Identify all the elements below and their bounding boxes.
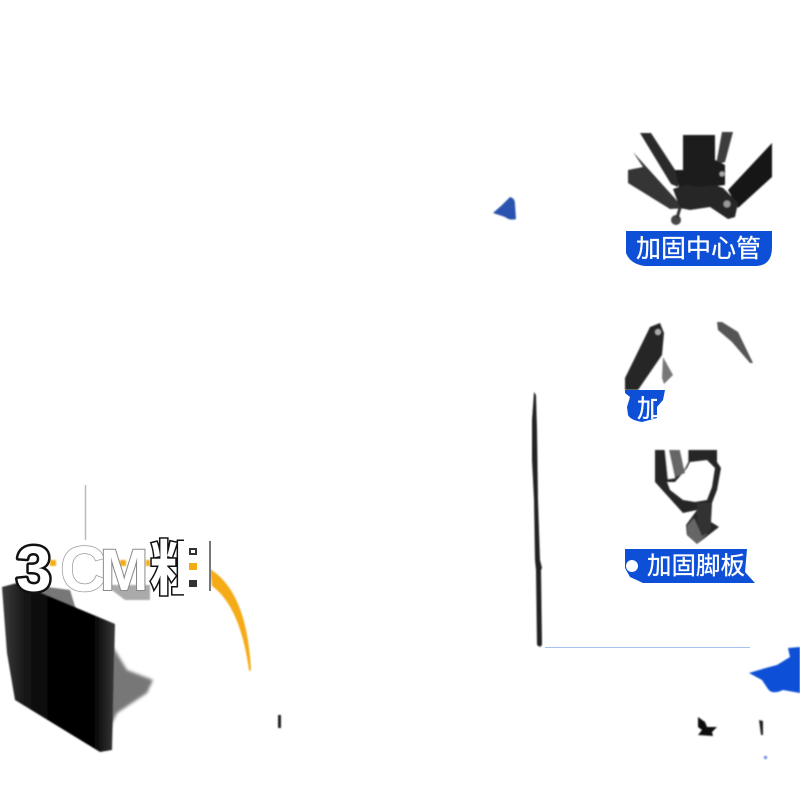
thin blue rule: [545, 646, 750, 648]
headline: 3CM粗: 粗: [149, 536, 209, 603]
textured backdrop behind headline: [50, 560, 150, 600]
panel: reinforced centre tube: [626, 132, 772, 266]
label bar: 加固中心管: 加固中心管: [636, 235, 761, 263]
photo: tube with rivet: [625, 322, 753, 390]
label bar: 加固脚板: 加固脚板: [647, 552, 745, 580]
thin guide line: [84, 485, 86, 540]
label bar: 加: 加: [637, 395, 662, 423]
panel: reinforced foot plate: [625, 450, 755, 583]
thin vertical pole: [532, 392, 542, 647]
orange arc: [210, 569, 251, 671]
label bar: 加固中心管: [626, 231, 772, 266]
headline: 3CM粗: 3: [16, 533, 52, 605]
photo: square foot plate: [2, 583, 153, 752]
panel: reinforced tube fragment: [625, 322, 753, 423]
headline: 3CM粗: C: [60, 533, 106, 605]
headline: 3CM粗: [15, 537, 184, 597]
panel: 3CM thick foot: [2, 485, 251, 752]
icon: blue corner shape: [749, 647, 800, 693]
headline remnants: right of 粗: [189, 541, 211, 591]
dark text fragments: [278, 715, 767, 759]
photo: centre tube hub: [628, 132, 772, 225]
icon: blue triangle fragment: [493, 197, 516, 220]
photo: foot plate bracket: [655, 450, 721, 544]
headline: 3CM粗: M: [100, 538, 148, 603]
